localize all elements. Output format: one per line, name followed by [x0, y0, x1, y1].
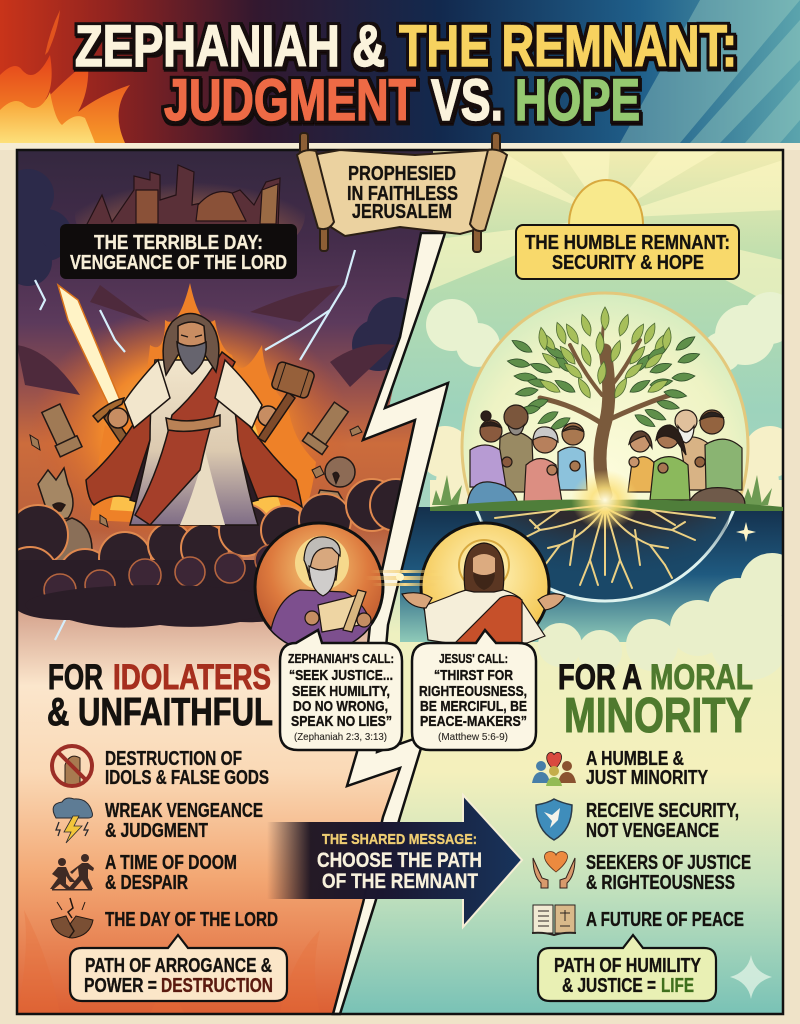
icon: no idols — [52, 746, 92, 786]
bullet list: judgment — [50, 746, 278, 938]
scroll knobs — [300, 133, 500, 252]
beard — [473, 572, 495, 590]
inner cloud scallops — [43, 544, 270, 595]
icon: open book — [532, 905, 576, 935]
arrow: shared message: THE SHARED MESSAGE: — [322, 831, 477, 848]
callout: path of humility — [538, 935, 716, 1001]
callout: Zephaniah's call: SEEK HUMILITY, — [292, 683, 390, 700]
callout: Jesus' call — [412, 630, 536, 750]
scroll rollers — [297, 150, 334, 229]
callout: path of arrogance: POWER = — [84, 975, 157, 997]
beam between portraits — [365, 570, 445, 586]
callout: Zephaniah's call: SPEAK NO LIES” — [291, 713, 392, 730]
sash — [135, 352, 235, 525]
icon: shield with dove — [536, 799, 572, 840]
text: time of doom: & DESPAIR — [105, 872, 188, 894]
text: wreak vengeance — [105, 800, 263, 842]
title — [75, 14, 737, 133]
heading: for idolaters and unfaithful — [47, 658, 273, 734]
portrait: Zephaniah — [255, 523, 383, 651]
heading: for a moral minority: MINORITY — [564, 689, 751, 743]
people praying right of tree — [628, 410, 745, 505]
person: girl in yellow — [628, 431, 660, 492]
robe — [130, 360, 258, 525]
glow behind ruins — [76, 186, 304, 235]
text: day of the lord: THE DAY OF THE LORD — [105, 909, 278, 931]
callout: Jesus' call: BE MERCIFUL, BE — [420, 698, 527, 715]
header banner — [0, 0, 800, 143]
label: the humble remnant: THE HUMBLE REMNANT: — [525, 232, 730, 254]
text: seekers of justice: SEEKERS OF JUSTICE — [586, 852, 751, 874]
panel: hope background — [342, 151, 782, 1013]
face — [473, 554, 495, 582]
callout: Zephaniah's call — [280, 630, 402, 750]
leaves dark — [507, 334, 701, 433]
text: receive security: NOT VENGEANCE — [586, 820, 719, 842]
sword — [58, 285, 130, 445]
text: time of doom: A TIME OF DOOM — [105, 852, 237, 874]
red sash — [455, 595, 522, 643]
heading: for idolaters and unfaithful: & UNFAITHFUL — [47, 691, 273, 734]
callout: Jesus' call: “THIRST FOR — [434, 667, 513, 684]
scroll: prophesied — [297, 133, 507, 252]
ground — [430, 500, 783, 511]
dark cloak lining — [130, 440, 258, 515]
callout: Jesus' call: RIGHTEOUSNESS, — [419, 683, 527, 700]
dark clouds upper — [2, 169, 423, 371]
icon: sparkle watermark — [730, 955, 772, 999]
icon: light rays in header — [620, 0, 800, 143]
leaves light — [537, 307, 673, 400]
heading: for idolaters and unfaithful: FOR — [48, 658, 103, 697]
clouds beside sphere — [419, 426, 796, 508]
callout: Zephaniah's call: ZEPHANIAH'S CALL: — [288, 652, 394, 666]
icon: hands holding heart — [533, 852, 575, 888]
heading: for a moral minority: MORAL — [650, 658, 753, 697]
text: destruction of idols: DESTRUCTION OF — [105, 748, 242, 770]
fire glow — [48, 309, 332, 533]
underground — [400, 507, 783, 642]
callout: Zephaniah's call: “SEEK JUSTICE... — [289, 667, 393, 684]
callout: Jesus' call: JESUS' CALL: — [439, 652, 508, 666]
clouds top of sphere — [426, 292, 796, 372]
callout: Jesus' call: PEACE-MAKERS” — [420, 713, 527, 730]
figure: the Lord with sword and gavel — [58, 285, 315, 525]
label: the terrible day — [60, 224, 297, 279]
person: woman in green — [650, 425, 690, 500]
title: ZEPHANIAH & — [75, 14, 385, 79]
label: the terrible day: VENGEANCE OF THE LORD — [70, 252, 287, 274]
sunrays — [430, 150, 783, 310]
label: the terrible day: THE TERRIBLE DAY: — [94, 232, 263, 254]
text: humble and just minority — [586, 748, 709, 789]
icon: fleeing figures — [50, 854, 94, 890]
arrow: shared message — [267, 795, 522, 927]
lower cloud fill — [44, 585, 197, 620]
cape — [86, 395, 175, 520]
robe folds — [180, 450, 225, 525]
title: HOPE — [515, 68, 640, 133]
scroll text: JERUSALEM — [352, 201, 452, 223]
scroll text: IN FAITHLESS — [347, 183, 458, 205]
scroll text: PROPHESIED — [348, 163, 456, 185]
scroll text — [347, 163, 458, 223]
text: wreak vengeance: WREAK VENGEANCE — [105, 800, 263, 822]
text: destruction of idols — [105, 748, 269, 789]
trunk and branches — [540, 315, 670, 495]
sphere lower half — [475, 511, 735, 602]
robe — [424, 588, 545, 643]
grass tufts — [432, 475, 772, 505]
cloud bank lower right — [538, 553, 800, 680]
callout: path of arrogance: DESTRUCTION — [161, 975, 273, 997]
fallen figure right — [318, 456, 356, 502]
hair — [464, 543, 504, 592]
text: destruction of idols: IDOLS & FALSE GODS — [105, 767, 269, 789]
broken pillar left — [40, 403, 82, 457]
people praying left of tree — [467, 405, 587, 505]
sun — [569, 180, 643, 225]
text: time of doom — [105, 852, 237, 894]
glass sphere — [460, 292, 750, 501]
divider: lightning bolt — [333, 233, 448, 1014]
heading: for idolaters and unfaithful: IDOLATERS — [113, 658, 271, 697]
text: receive security — [586, 800, 739, 842]
icon: cracked earth — [51, 898, 93, 938]
ruined city — [85, 165, 280, 228]
tree roots — [495, 505, 715, 588]
person: woman in lavender — [467, 411, 518, 505]
icon: people with heart — [532, 752, 576, 786]
icon: storm cloud — [53, 798, 92, 843]
hands — [402, 593, 432, 608]
heading: for a moral minority — [558, 658, 753, 743]
fragments of idols — [30, 426, 362, 533]
lightning left panel — [35, 250, 355, 640]
icon: flames in header — [0, 10, 130, 143]
dark storm clouds mid — [17, 285, 395, 395]
face — [178, 322, 206, 355]
dark ground clouds — [18, 478, 401, 560]
callout: Zephaniah's call: DO NO WRONG, — [293, 698, 388, 715]
text: seekers of justice — [586, 852, 751, 894]
broken pillar right — [302, 400, 351, 455]
beard — [177, 342, 206, 374]
arrow: shared message: CHOOSE THE PATH — [317, 849, 482, 872]
panel: judgment background — [2, 150, 437, 1014]
flames behind figure — [90, 283, 316, 530]
person: elder in tan — [675, 410, 710, 490]
lower panel flames — [24, 911, 320, 948]
bullet list: hope — [532, 748, 751, 935]
root glow — [571, 470, 639, 530]
person: elder woman in pink — [524, 427, 562, 502]
callout: path of arrogance: PATH OF ARROGANCE & — [85, 955, 272, 977]
portrait: Jesus — [402, 523, 565, 651]
cloud mass — [18, 560, 264, 628]
person: boy in blue — [558, 423, 587, 490]
person: man in olive — [498, 405, 534, 492]
callout: path of humility: PATH OF HUMILITY — [554, 955, 702, 977]
text: humble and just minority: A HUMBLE & — [586, 748, 684, 770]
gavel — [258, 361, 315, 442]
paper strip under header — [0, 143, 800, 150]
text: wreak vengeance: & JUDGMENT — [105, 820, 208, 842]
person: man in green shirt — [688, 410, 745, 505]
fallen statue bust — [37, 466, 93, 560]
callout: Jesus' call: (Matthew 5:6-9) — [438, 731, 508, 743]
label: the humble remnant: SECURITY & HOPE — [552, 252, 704, 274]
tree in sphere — [507, 307, 701, 495]
text: seekers of justice: & RIGHTEOUSNESS — [586, 872, 735, 894]
hands — [108, 408, 128, 428]
heading: for a moral minority: FOR A — [558, 658, 642, 697]
text: humble and just minority: JUST MINORITY — [586, 767, 709, 789]
callout: path of humility: & JUSTICE = — [562, 975, 656, 997]
text: receive security: RECEIVE SECURITY, — [586, 800, 739, 822]
text: future of peace: A FUTURE OF PEACE — [586, 909, 744, 931]
callout: path of humility: LIFE — [661, 975, 694, 997]
title: VS. — [431, 68, 503, 133]
dark root mass — [480, 511, 730, 559]
arrow: shared message: OF THE REMNANT — [322, 870, 478, 893]
arms — [124, 360, 170, 428]
callout: path of arrogance — [70, 935, 287, 1001]
title: JUDGMENT — [164, 68, 416, 133]
callout: Zephaniah's call: (Zephaniah 2:3, 3:13) — [294, 731, 387, 743]
label: the humble remnant — [516, 225, 739, 279]
sparkle — [736, 522, 756, 542]
hair — [163, 314, 219, 375]
